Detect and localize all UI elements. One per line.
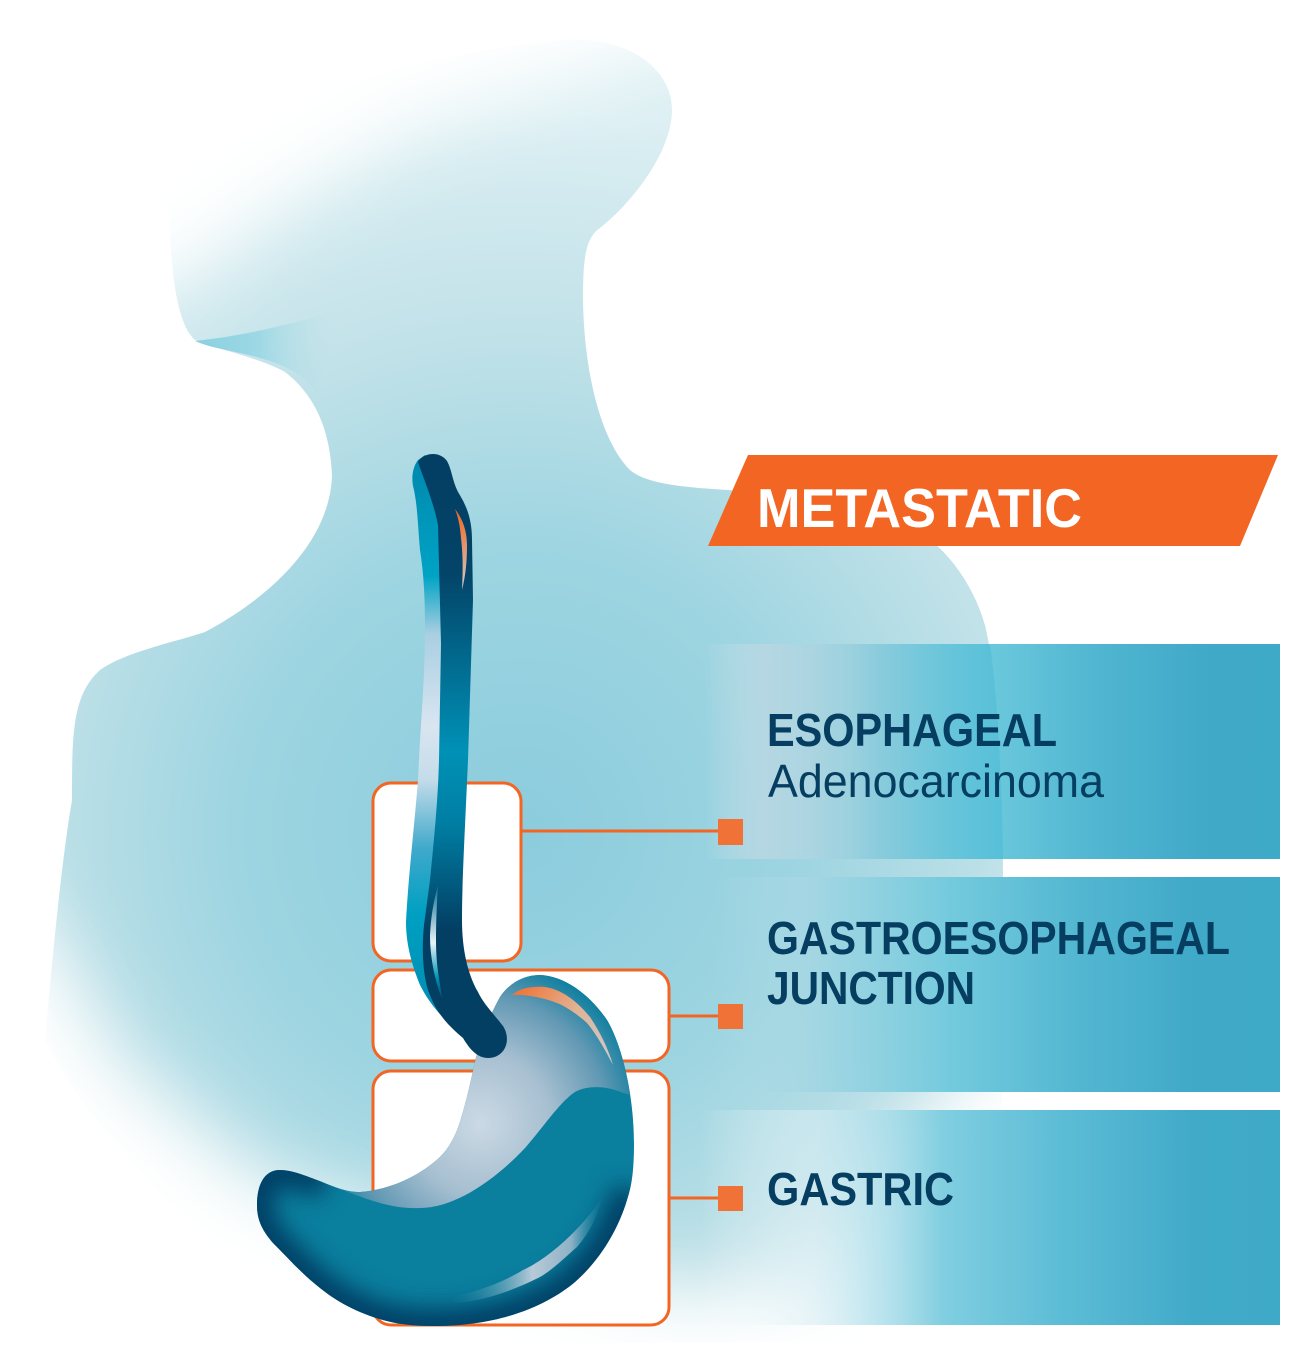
label: gastroesophageal junction [767, 912, 1230, 1014]
label: gastroesophageal junction: JUNCTION [767, 962, 975, 1014]
region box: esophagus [373, 783, 521, 961]
label: esophageal adenocarcinoma: ESOPHAGEAL [767, 704, 1057, 756]
panel: gastroesophageal junction [715, 877, 1280, 1092]
chin shadow [195, 320, 306, 376]
label: esophageal adenocarcinoma [767, 704, 1104, 807]
panel: gastric [700, 1110, 1280, 1325]
body silhouette [45, 40, 1003, 1345]
panel: esophageal [705, 644, 1280, 859]
esophagus wall [418, 454, 507, 1058]
connector: gastric [668, 1186, 743, 1211]
stomach lower shine [464, 1206, 598, 1302]
metastatic banner [708, 455, 1278, 546]
esophagus orange highlight [455, 509, 467, 590]
esophagus [406, 454, 507, 1058]
connector: esophageal [520, 819, 743, 845]
label: gastroesophageal junction: GASTROESOPHAGEAL [767, 912, 1230, 964]
stomach rim shadow [257, 1170, 630, 1326]
esophagus lower glint [430, 885, 443, 1001]
esophagus lumen [406, 455, 480, 1042]
stomach [257, 975, 634, 1326]
label: esophageal adenocarcinoma: Adenocarcinoma [768, 755, 1104, 807]
stomach orange highlight [512, 987, 613, 1065]
region box: junction [373, 970, 669, 1061]
connector: gastroesophageal junction [668, 1004, 743, 1029]
metastatic banner: METASTATIC [757, 477, 1082, 539]
region box: stomach [373, 1071, 669, 1325]
stomach upper lining [325, 975, 630, 1208]
label: gastric: GASTRIC [767, 1163, 954, 1215]
